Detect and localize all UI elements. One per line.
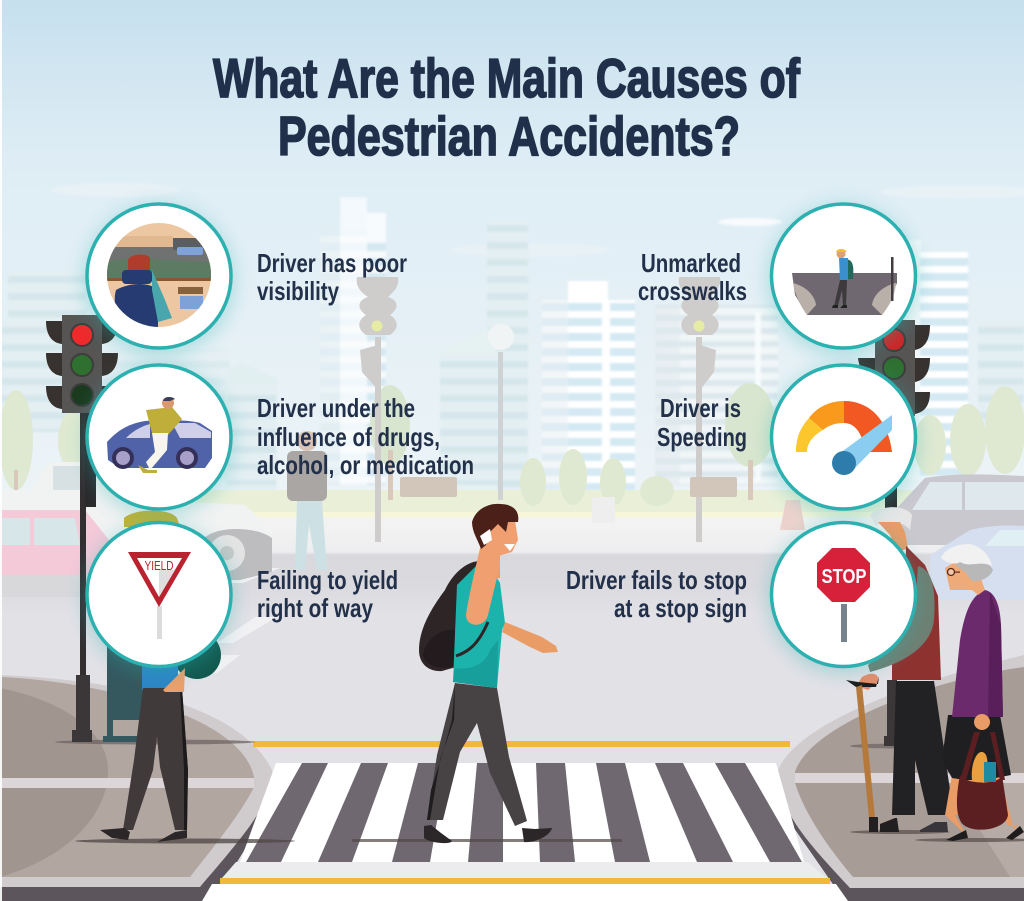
label: driver fails to stop bbox=[566, 565, 747, 623]
elderly man with cane bbox=[846, 507, 950, 834]
faded background bin bbox=[592, 497, 615, 523]
label: failing to yield bbox=[257, 565, 398, 623]
label: unmarked crosswalks: Unmarked bbox=[641, 248, 741, 278]
circle: driver under the influence bbox=[83, 365, 235, 517]
circle: unmarked crosswalks bbox=[768, 204, 920, 356]
faded city skyline bbox=[0, 197, 1024, 500]
label: driver is speeding bbox=[657, 393, 747, 452]
shoes bbox=[424, 825, 452, 843]
icon: car interior bbox=[107, 223, 211, 327]
faded road arrows bbox=[200, 568, 280, 673]
faded pink pedestrian bbox=[780, 500, 805, 530]
far pavement and road bbox=[0, 513, 1024, 618]
pale yellow kerb strip bbox=[0, 512, 1024, 517]
mouth bbox=[504, 544, 515, 551]
faded benches bbox=[400, 477, 737, 497]
sky background bbox=[0, 0, 1024, 520]
label: driver under the influence bbox=[257, 393, 474, 480]
faded background street lights bbox=[357, 277, 720, 542]
main road bbox=[0, 616, 1024, 901]
left street corner bbox=[0, 675, 272, 901]
label: driver is speeding: Speeding bbox=[657, 422, 747, 452]
white lower road bbox=[202, 884, 848, 901]
top yellow road line bbox=[253, 741, 790, 747]
elderly woman with bag bbox=[915, 544, 1024, 842]
white left edge bbox=[0, 0, 2, 901]
label: driver fails to stop: at a stop sign bbox=[614, 593, 747, 623]
trash bin bbox=[103, 645, 143, 742]
label: driver has poor visibility: Driver has poor bbox=[257, 248, 407, 278]
strap bbox=[456, 622, 488, 656]
phone bbox=[480, 529, 492, 545]
neck bbox=[483, 545, 500, 578]
label: unmarked crosswalks bbox=[638, 248, 747, 306]
circle: driver is speeding bbox=[768, 365, 920, 517]
face bbox=[482, 520, 518, 556]
label: driver under the influence: Driver under the bbox=[257, 393, 415, 423]
lower road band bbox=[222, 862, 826, 878]
pedestrian left, behind circle bbox=[75, 510, 295, 844]
legs bbox=[427, 683, 527, 826]
icon: stop sign: STOP bbox=[822, 566, 866, 588]
icon: stop sign bbox=[817, 548, 870, 642]
faded background pedestrian bbox=[287, 431, 327, 570]
icon: speedometer bbox=[796, 401, 892, 475]
label: driver under the influence: alcohol, or medication bbox=[257, 450, 474, 480]
label: unmarked crosswalks: crosswalks bbox=[638, 276, 747, 306]
label: failing to yield: Failing to yield bbox=[257, 565, 398, 595]
label: failing to yield: right of way bbox=[257, 593, 373, 623]
right traffic light bbox=[850, 320, 950, 748]
title bbox=[213, 47, 801, 167]
clouds bbox=[50, 183, 1024, 257]
bottom yellow road line bbox=[220, 878, 830, 884]
circle: driver has poor visibility bbox=[83, 204, 235, 356]
right street corner bbox=[778, 655, 1024, 901]
ground shadow bbox=[352, 839, 622, 842]
icon: walker on road bbox=[792, 249, 897, 315]
icon: yield sign bbox=[128, 552, 191, 639]
label: driver has poor visibility: visibility bbox=[257, 276, 339, 306]
label: driver under the influence: influence of drugs, bbox=[257, 422, 440, 452]
faded parked cars right bbox=[895, 474, 1024, 600]
raised arm bbox=[466, 540, 500, 625]
label: driver fails to stop: Driver fails to stop bbox=[566, 565, 747, 595]
back edge of trousers bbox=[427, 683, 455, 820]
title: Pedestrian Accidents? bbox=[278, 105, 740, 167]
faded trees and hedge bbox=[0, 383, 1024, 513]
faded parked cars left bbox=[0, 462, 272, 597]
label: driver is speeding: Driver is bbox=[660, 393, 741, 423]
main pedestrian on phone bbox=[352, 504, 622, 843]
icon: yield sign: YIELD bbox=[144, 558, 174, 573]
label: driver has poor visibility bbox=[257, 248, 407, 306]
zebra crossing bbox=[240, 763, 804, 862]
icon: leaning man and car bbox=[107, 397, 212, 473]
title: What Are the Main Causes of bbox=[213, 47, 801, 109]
extended arm bbox=[502, 622, 558, 653]
circle: driver fails to stop bbox=[768, 522, 920, 674]
hair bbox=[472, 504, 518, 549]
shirt bbox=[453, 565, 505, 688]
circle: failing to yield bbox=[83, 522, 235, 674]
backpack bbox=[419, 561, 479, 671]
left traffic light bbox=[46, 315, 255, 744]
